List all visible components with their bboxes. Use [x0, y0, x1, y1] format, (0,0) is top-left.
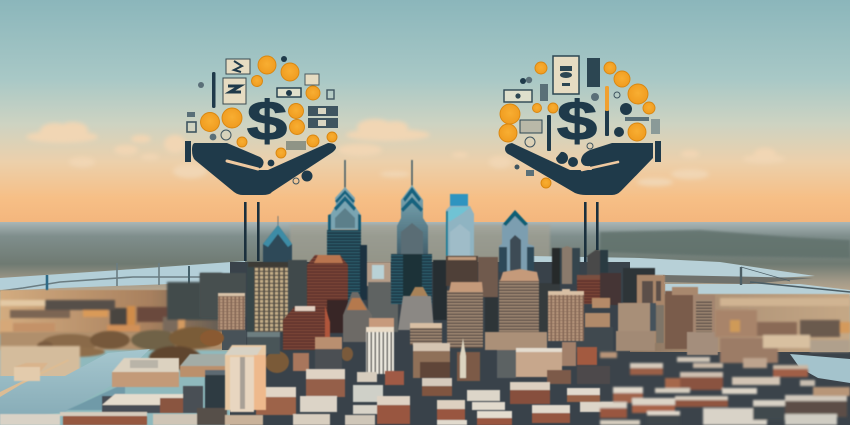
mid-rise: striped brown tower right: [499, 269, 539, 337]
mid-rise: striped brown tower centre: [447, 282, 483, 348]
arch at end of street: [367, 262, 398, 332]
centre dark filler towers: [200, 257, 560, 333]
left trees: [0, 327, 230, 370]
sky background: [0, 0, 850, 225]
skyscraper: far left tower: [263, 216, 292, 268]
right bank strip: [663, 275, 813, 284]
right hazy city: [600, 294, 850, 360]
tan tower foreground: [225, 345, 266, 412]
tree patches near towers: [200, 330, 353, 373]
left river: [0, 261, 245, 291]
left bridge: [0, 263, 243, 292]
centre low-rise blocks: [293, 323, 610, 385]
right bridge: [741, 267, 850, 292]
icon: right money hand: [499, 56, 661, 195]
mid-rise: left brick tower: [218, 293, 245, 330]
support lines under right hand: [584, 202, 599, 262]
harbour pier: [0, 359, 69, 397]
left low city blocks: [0, 273, 222, 335]
right street base: [600, 352, 850, 425]
left thumb highlight: [227, 161, 258, 169]
centre plain haze: [290, 225, 550, 263]
right low mid blocks: [715, 298, 850, 363]
mid-rise: beige tower right: [548, 289, 584, 341]
support lines under left hand: [244, 202, 260, 261]
rooftop rows right: [600, 352, 850, 425]
right dollar sign: $: [557, 89, 597, 152]
right coloured bar: [605, 86, 609, 111]
right thumb highlight: [582, 162, 618, 170]
dark block beside tower: [222, 330, 246, 350]
left banknotes and cards: [187, 59, 338, 184]
left dark icons: [198, 56, 312, 182]
right beige-brown tower: [665, 287, 718, 355]
clouds: [26, 119, 785, 186]
lower-left buildings: [0, 354, 263, 425]
right tall tower group: [616, 268, 665, 351]
right distant towers: [552, 246, 621, 352]
mid-rise: tan domed tower: [343, 292, 372, 342]
right cuff: [655, 141, 661, 162]
harbour block: [14, 363, 48, 381]
right banknotes and cards: [504, 56, 660, 176]
right hill: [600, 230, 850, 258]
skyscraper: tower four: [499, 210, 534, 272]
mid-rise: maroon block: [283, 306, 330, 350]
right hand: [505, 143, 653, 195]
mid-rise: red brick tower: [307, 255, 348, 333]
skyscraper: tower one with spire: [327, 160, 367, 302]
left dollar sign: $: [247, 89, 287, 152]
skyscraper: tower two with spire: [391, 160, 432, 304]
left hazy city: [0, 290, 250, 334]
mid-rise: striped beige tower: [247, 262, 288, 354]
skyscraper: tower three with blue top: [446, 194, 474, 256]
distant landscape: [0, 222, 850, 292]
rooftop rows centre: [256, 369, 614, 425]
left hand: [192, 143, 336, 195]
mid-rise: grey domed tower: [398, 287, 434, 330]
left coins: [200, 56, 337, 158]
icon: left money hand: [185, 56, 338, 195]
lower-right water: [790, 354, 850, 383]
lower-left water: [0, 349, 150, 420]
right river: [530, 256, 850, 296]
right dark icons: [520, 58, 632, 167]
mid-rise: dark brown block: [446, 256, 478, 286]
mid-rise: white striped tower: [366, 318, 394, 374]
right coins: [499, 62, 655, 188]
lower-left tan shore: [0, 346, 80, 380]
left cuff: [185, 141, 191, 162]
city base: [230, 262, 630, 425]
